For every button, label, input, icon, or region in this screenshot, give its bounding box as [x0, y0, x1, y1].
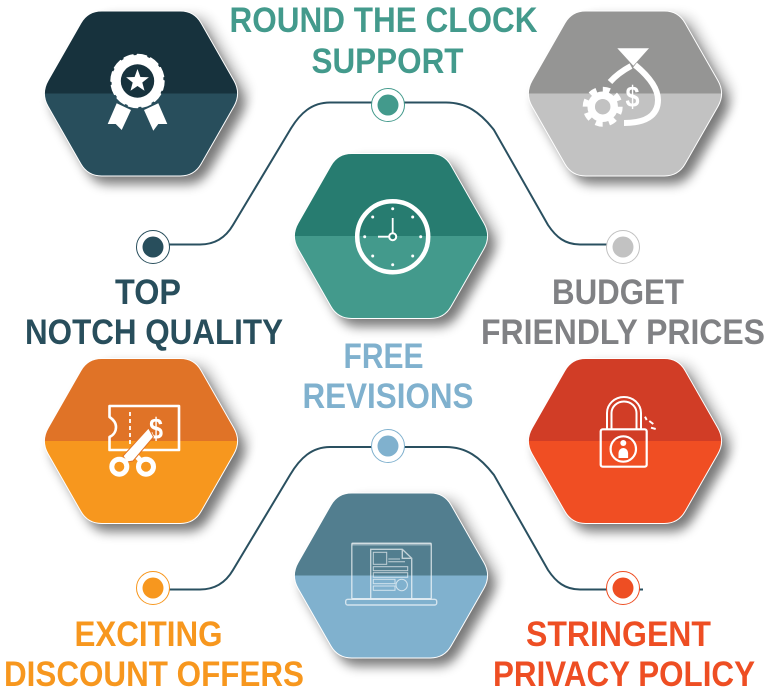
marker: top notch quality	[136, 230, 170, 264]
heading: free revisions: FREE	[344, 337, 424, 376]
icon: laptop with document	[346, 543, 437, 605]
icon: award ribbon with star	[108, 55, 167, 131]
icon: coupon and scissors	[110, 406, 179, 474]
heading: top notch quality: NOTCH QUALITY	[25, 313, 283, 352]
panel: top notch quality hexagon	[40, 10, 253, 184]
heading: round the clock support: ROUND THE CLOCK	[230, 1, 538, 40]
heading: exciting discount offers: EXCITING	[74, 615, 222, 654]
marker: free revisions	[372, 430, 404, 462]
heading: exciting discount offers: DISCOUNT OFFERS	[4, 655, 304, 694]
connector: lower network lines	[153, 447, 643, 590]
panel: budget friendly prices hexagon	[524, 10, 737, 184]
heading: exciting discount offers	[4, 615, 304, 694]
panel: free revisions hexagon	[290, 492, 503, 666]
heading: round the clock support	[230, 1, 538, 81]
heading: free revisions	[302, 337, 474, 416]
heading: budget friendly prices	[481, 273, 765, 352]
icon: coupon and scissors: $	[149, 413, 163, 446]
heading: budget friendly prices: BUDGET	[552, 273, 684, 312]
heading: stringent privacy policy	[493, 615, 755, 694]
heading: stringent privacy policy: STRINGENT	[526, 615, 711, 654]
panel: stringent privacy policy hexagon	[524, 358, 737, 532]
icon: padlock with person	[601, 397, 656, 467]
heading: round the clock support: SUPPORT	[312, 42, 464, 81]
panel: round the clock hexagon	[290, 153, 503, 327]
marker: round the clock	[372, 88, 404, 122]
connector: upper network lines	[153, 102, 623, 244]
marker: budget friendly prices	[606, 230, 640, 264]
heading: free revisions: REVISIONS	[302, 377, 474, 416]
heading: top notch quality: TOP	[115, 273, 181, 312]
marker: exciting discount offers	[136, 572, 170, 604]
panel: exciting discount offers hexagon	[40, 358, 253, 532]
icon: money bag with gear	[586, 48, 658, 124]
icon: wall clock	[357, 201, 428, 272]
heading: top notch quality	[25, 273, 283, 352]
icon: money bag with gear: $	[626, 81, 640, 114]
marker: stringent privacy policy	[606, 572, 640, 604]
